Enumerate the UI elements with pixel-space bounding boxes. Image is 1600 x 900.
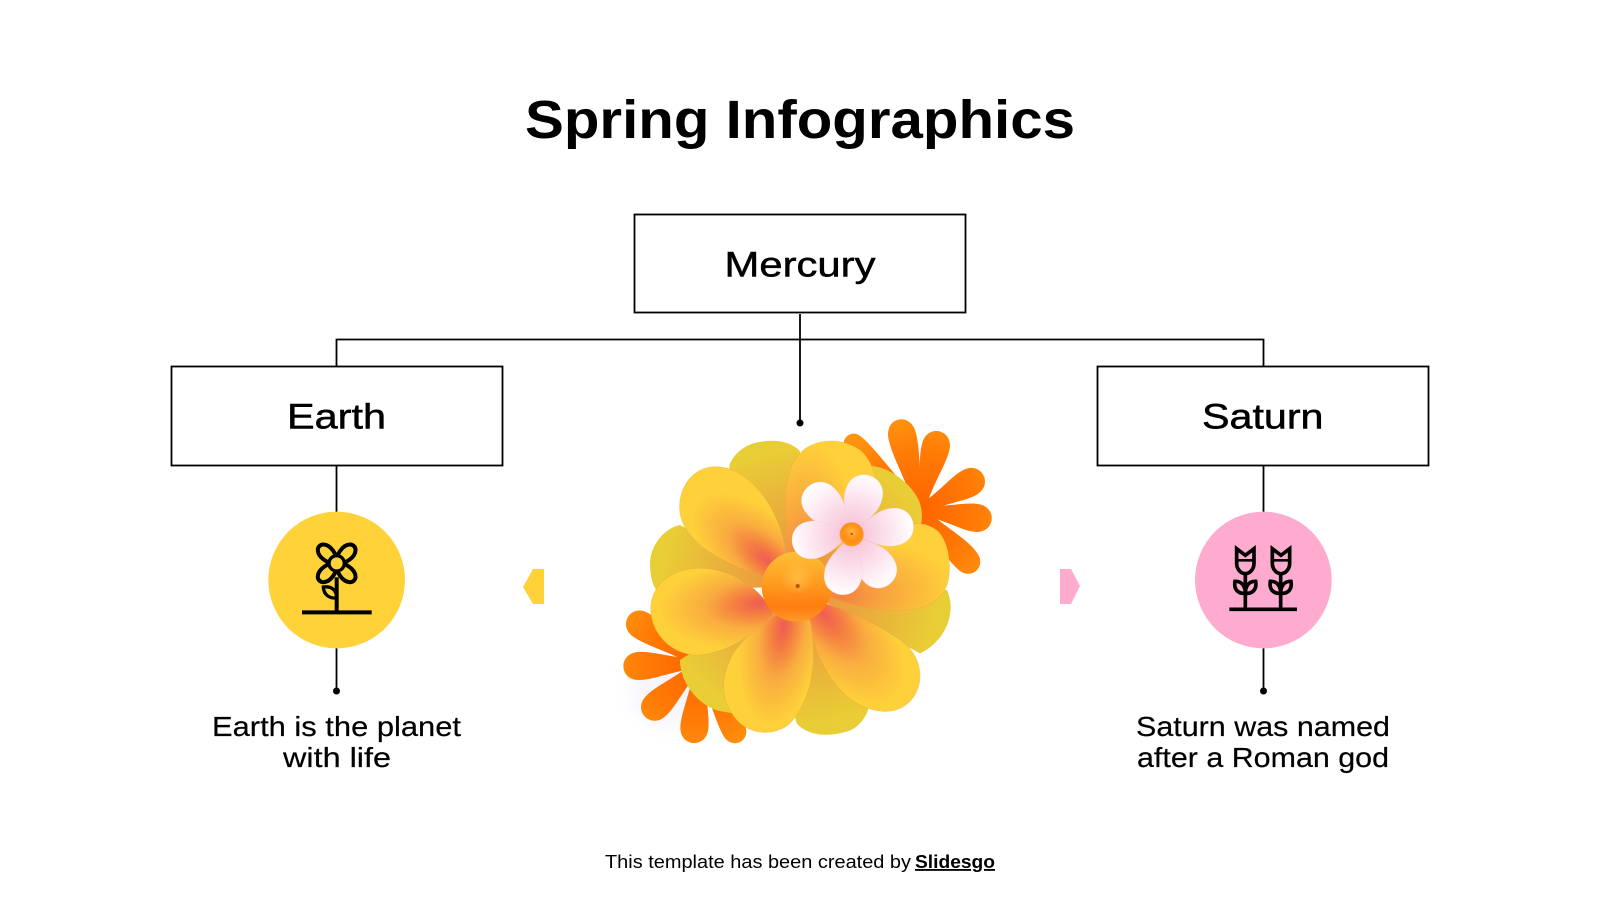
chevron: yellow [523, 569, 544, 604]
text: Saturn description: Saturn was named [1136, 711, 1390, 742]
box: Earth: Earth [287, 398, 386, 436]
box: Mercury [634, 214, 966, 312]
chevron: pink [1060, 569, 1080, 604]
text: Earth description: with life [282, 742, 391, 773]
text: Earth description: Earth is the planet [212, 711, 461, 742]
icon: yellow circle with flower [268, 512, 405, 648]
footer credit: This template has been created by [605, 851, 912, 872]
connector lines [334, 314, 1266, 694]
text: Saturn description: after a Roman god [1137, 742, 1389, 773]
title: Spring Infographics [525, 90, 1075, 150]
central flower illustration [621, 416, 994, 747]
box: Saturn [1098, 366, 1428, 466]
text: Saturn description [1136, 711, 1390, 773]
text: Earth description [212, 711, 461, 773]
box: Earth [172, 366, 502, 466]
icon: pink circle with tulips [1195, 512, 1332, 648]
box: Saturn: Saturn [1202, 398, 1324, 436]
footer credit: Slidesgo [915, 851, 995, 872]
box: Mercury: Mercury [724, 246, 876, 284]
